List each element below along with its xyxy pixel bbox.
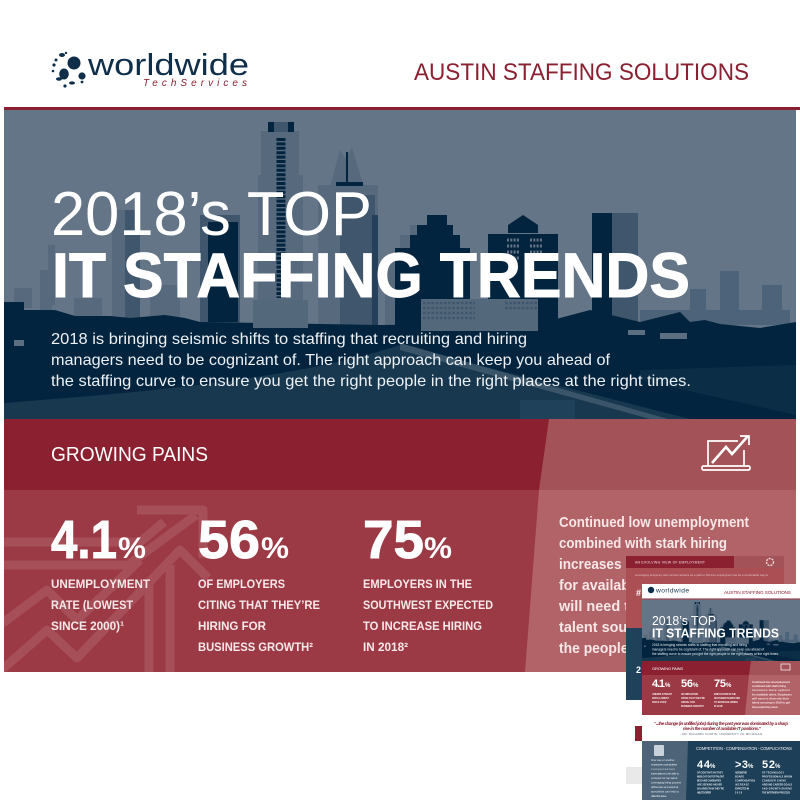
- summary paragraph: the people they need.: [559, 640, 701, 657]
- thumbnail growing pains panel: UNEMPLOYMENT: [652, 693, 673, 696]
- arrows background graphic: [0, 510, 208, 680]
- thumbnail growing pains panel: SINCE 2000)¹: [652, 700, 667, 704]
- thumbnail growing pains panel: EMPLOYERS IN THE: [714, 693, 736, 696]
- thumbnail competition panel: ARE SEEKING HIGHER: [697, 784, 722, 786]
- icon: dotted globe: [52, 52, 86, 88]
- thumbnail growing pains panel: combined with stark hiring: [752, 684, 786, 688]
- thumbnail competition panel: PROFESSIONALS WHOM: [762, 776, 792, 778]
- hero paragraph: managers need to be cognizant of. The right approach can keep you ahead of: [51, 352, 611, 369]
- thumbnail hero: 2018 is bringing seismic shifts to staffing that recruiting and hiring: [652, 643, 747, 647]
- back page icon: cog: [766, 558, 774, 566]
- panel: growing pains: [0, 419, 796, 680]
- logo: worldwide TechServices: [52, 47, 249, 89]
- thumbnail competition panel: 44: [697, 759, 711, 771]
- thumbnail growing pains panel: RATE (LOWEST: [652, 697, 670, 700]
- thumbnail competition panel: INCREASE: [735, 784, 749, 786]
- thumbnail competition panel: AROUND CAREER GOALS: [762, 784, 792, 786]
- thumbnail competition panel: OF TECHNOLOGY: [762, 772, 784, 774]
- stat: 56%: BUSINESS GROWTH²: [198, 640, 313, 654]
- thumbnail growing pains panel: [642, 661, 800, 715]
- red header rule: [4, 107, 800, 110]
- thumbnail growing pains panel: 56: [681, 678, 693, 690]
- stat: 4.1%: [51, 510, 151, 633]
- thumbnail quote: - DR. RICHARD CURTIN, UNIVERSITY OF MICHIGAN: [680, 732, 762, 736]
- thumbnail growing pains panel: talent sourcing in 2018 to get: [752, 700, 790, 704]
- thumbnail competition panel: Leveraging hiring process: [651, 780, 682, 784]
- thumbnail competition panel: compensation: [651, 767, 675, 771]
- thumbnail hero: IT STAFFING TRENDS: [652, 626, 779, 640]
- thumbnail competition panel: ACROSS THE: [735, 772, 747, 774]
- stat: 56%: %: [261, 532, 289, 565]
- thumbnail growing pains panel: TO INCREASE HIRING: [714, 701, 738, 704]
- thumbnail header title: AUSTIN STAFFING SOLUTIONS: [724, 590, 791, 596]
- stat: 56%: HIRING FOR: [198, 619, 266, 633]
- thumbnail competition panel: %: [775, 764, 781, 770]
- thumbnail competition panel: offset this issue.: [651, 794, 667, 798]
- back page stat lower: 2: [636, 665, 641, 675]
- thumbnail growing pains panel: GROWING PAINS: [652, 666, 683, 671]
- section heading: GROWING PAINS: [51, 444, 208, 466]
- hero title line 2: IT STAFFING TRENDS: [52, 241, 690, 311]
- thumbnail hero: the staffing curve to ensure you get the right people in the right places at the right times.: [652, 652, 779, 656]
- stat: 4.1%: 4.1: [51, 510, 117, 570]
- hero paragraph: the staffing curve to ensure you get the right people in the right places at the right times.: [51, 373, 691, 390]
- stat: 56%: 56: [198, 510, 260, 570]
- thumbnail competition panel: expectations to be able to: [651, 772, 679, 776]
- thumbnail quote: rise in the number of available IT positions.”: [683, 726, 762, 731]
- hero title line 1: 2018’s TOP: [51, 180, 372, 249]
- summary paragraph: will need to diversify their: [558, 598, 737, 615]
- thumbnail logo: worldwide: [655, 588, 689, 594]
- summary paragraph: combined with stark hiring: [559, 535, 727, 552]
- thumbnail competition panel: 52: [762, 759, 775, 771]
- icon: laptop with rising chart: [702, 436, 750, 470]
- summary paragraph: increases more options: [559, 556, 711, 573]
- thumbnail competition panel: efficiencies and external: [651, 785, 678, 789]
- thumbnail: front page: [642, 584, 800, 800]
- stat: 4.1%: %: [118, 532, 146, 565]
- thumbnail competition panel: CONSIDER GIVING: [762, 780, 786, 782]
- wordmark: worldwide: [87, 47, 249, 82]
- thumbnail competition panel: EXPECTED IN: [735, 788, 749, 790]
- summary paragraph: for available talent. Employers: [559, 577, 764, 594]
- thumbnail: page remnants below: [626, 726, 643, 784]
- tagline: TechServices: [143, 78, 247, 89]
- thumbnail growing pains panel: %: [693, 683, 699, 689]
- thumbnail growing pains panel: %: [726, 683, 732, 689]
- stat: 75%: EMPLOYERS IN THE: [363, 577, 472, 591]
- thumbnail competition panel: 2018: [735, 792, 743, 794]
- thumbnail competition panel: [642, 741, 800, 800]
- stat: 75%: 75: [363, 510, 424, 570]
- thumbnail quote: [654, 721, 788, 736]
- summary paragraph: talent sourcing in 2018 to get: [559, 619, 759, 636]
- thumbnail growing pains panel: will need to diversify their: [751, 696, 790, 700]
- thumbnail competition panel: SALARIES THAN THEY’RE: [697, 788, 724, 790]
- hero paragraph: 2018 is bringing seismic shifts to staffing that recruiting and hiring: [51, 331, 527, 348]
- stat: 4.1%: RATE (LOWEST: [51, 598, 134, 612]
- stat: 56%: CITING THAT THEY’RE: [198, 598, 320, 612]
- thumbnail growing pains panel: SOUTHWEST EXPECTED: [714, 697, 740, 700]
- summary paragraph: Continued low unemployment: [559, 514, 749, 531]
- stat: 56%: OF EMPLOYERS: [198, 577, 285, 591]
- thumbnail quote: “...the change (in unfilled jobs) during the past year was dominated by a sharp: [654, 721, 788, 726]
- skyline: [4, 110, 796, 419]
- stat: 4.1%: UNEMPLOYMENT: [51, 577, 151, 591]
- thumbnail header rule: [642, 598, 800, 600]
- thumbnail competition panel: AND GROWTH DURING: [762, 788, 792, 790]
- stat: 56%: [198, 510, 320, 654]
- summary paragraph: [558, 514, 764, 657]
- thumbnail growing pains panel: HIRING FOR: [681, 701, 695, 704]
- hero paragraph: [51, 331, 691, 390]
- stat: 4.1%: SINCE 2000)¹: [51, 619, 124, 633]
- thumbnail hero: managers need to be cognizant of. The right approach can keep you ahead of: [652, 648, 764, 652]
- stat: 75%: [363, 510, 493, 654]
- thumbnail competition panel: MISS OUT ON TOP TALENT: [697, 776, 725, 778]
- stat: 75%: IN 2018²: [363, 640, 408, 654]
- thumbnail competition panel: BECAUSE CANDIDATES: [697, 780, 721, 782]
- thumbnail competition panel: compete for top talent.: [651, 776, 678, 780]
- thumbnail growing pains panel: increases more options: [752, 688, 790, 692]
- thumbnail competition panel: specialists can help to: [651, 790, 679, 794]
- thumbnail growing pains panel: CITING THAT THEY’RE: [681, 697, 705, 700]
- thumbnail competition panel: OF CIOS THAT SAY THEY: [697, 772, 723, 774]
- thumbnail competition panel: COMPENSATION: [735, 780, 755, 782]
- thumbnail competition panel: %: [710, 764, 716, 770]
- thumbnail competition panel: >3: [735, 759, 748, 771]
- section backgrounds: [4, 419, 796, 672]
- thumbnail hero: [642, 600, 800, 661]
- thumbnail growing pains panel: 75: [714, 678, 726, 690]
- stat: 75%: SOUTHWEST EXPECTED: [363, 598, 493, 612]
- thumbnail competition panel: THE INTERVIEW PROCESS: [762, 792, 790, 794]
- header title: AUSTIN STAFFING SOLUTIONS: [414, 59, 749, 86]
- thumbnail: back page: [626, 556, 784, 700]
- thumbnail growing pains panel: the people they need.: [752, 705, 778, 709]
- thumbnail growing pains panel: 4.1: [652, 678, 665, 690]
- thumbnail growing pains panel: for available talent. Employers: [752, 692, 792, 696]
- thumbnail competition panel: ABLE TO OFFER: [697, 792, 711, 794]
- hero panel: [4, 110, 796, 419]
- stat: 75%: TO INCREASE HIRING: [363, 619, 482, 633]
- thumbnail growing pains panel: IN 2018²: [714, 704, 723, 708]
- thumbnail competition panel: BOARD: [735, 776, 744, 778]
- thumbnail growing pains panel: Continued low unemployment: [752, 680, 790, 684]
- back page intro text: Leveraging temporary and contract workers as a path to full-time employment can be a comfortable way to: [635, 573, 769, 577]
- thumbnail growing pains panel: %: [665, 683, 671, 689]
- back page heading: AN EVOLVING VIEW OF EMPLOYMENT: [635, 560, 705, 564]
- thumbnail competition panel: %: [748, 764, 754, 770]
- thumbnail growing pains panel: BUSINESS GROWTH²: [681, 704, 704, 708]
- thumbnail competition panel: employers must address: [651, 762, 678, 766]
- stat: 75%: %: [424, 532, 452, 565]
- back page stat: #: [636, 588, 641, 598]
- thumbnail growing pains panel: OF EMPLOYERS: [681, 693, 698, 696]
- thumbnail hero: 2018’s TOP: [652, 613, 716, 628]
- thumbnail competition panel: COMPETITION - COMPENSATION - COMPLICATIONS: [696, 746, 792, 751]
- thumbnail competition panel: One way or another,: [651, 758, 675, 762]
